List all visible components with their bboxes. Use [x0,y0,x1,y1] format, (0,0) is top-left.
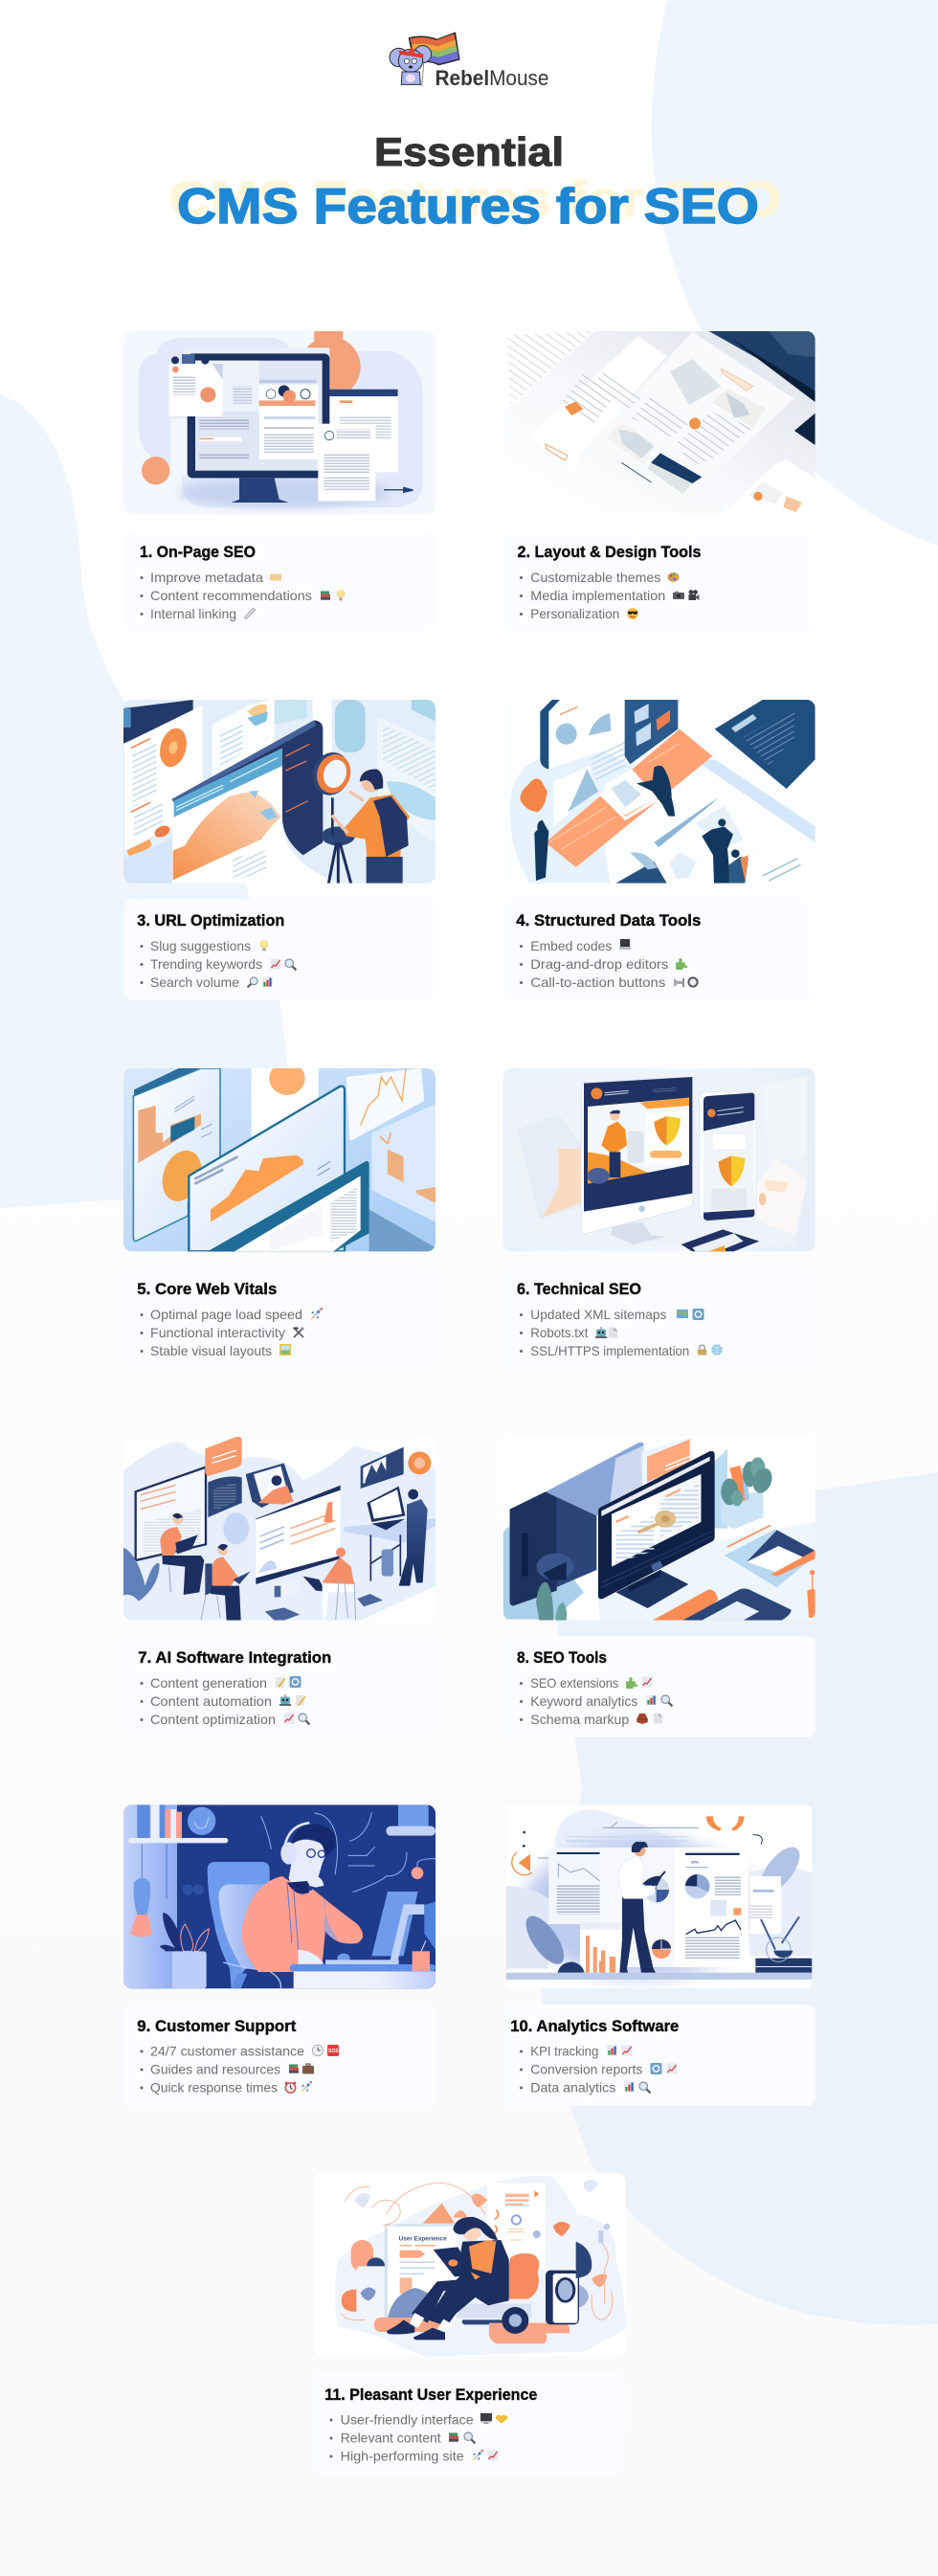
heading: 9. Customer Support [137,2017,297,2035]
illustration: desktop and tablet with shields [503,1068,815,1251]
heading: 4. Structured Data Tools [516,911,701,930]
list item: Functional interactivity: Functional interactivity [150,1325,285,1340]
illustration: isometric layout pages [503,331,815,514]
icon: mouse mascot [390,46,432,86]
illustration: man reviewing analytics [506,1804,812,1988]
heading: 3. URL Optimization [137,911,284,930]
list item: Slug suggestions: Slug suggestions [150,938,251,953]
list item: SSL/HTTPS implementation: SSL/HTTPS implementation [530,1343,689,1358]
title line 1: Essential [374,129,564,174]
heading: 5. Core Web Vitals [137,1280,277,1298]
list item: Content generation: Content generation [150,1675,267,1691]
list item: Content optimization: Content optimization [150,1712,276,1727]
list item: SEO extensions: SEO extensions [530,1675,618,1691]
text card [123,1636,436,1737]
panel: 11. Pleasant User Experience [313,2173,625,2475]
list item: Robots.txt [520,1325,617,1340]
list item: Data analytics: Data analytics [530,2079,615,2094]
heading: 2. Layout & Design Tools [517,543,701,561]
list item: Optimal page load speed: Optimal page load speed [150,1307,302,1322]
text card [313,2373,625,2475]
illustration: isometric monitor with key [503,1437,815,1621]
text card [503,2005,815,2106]
wordmark: RebelMouse [435,66,549,90]
panel: 2. Layout & Design Tools [503,331,815,632]
illustration: woman with tablet and UX page: User Experience [399,2236,447,2242]
text card [503,1267,815,1369]
list item: Robots.txt: Robots.txt [530,1325,588,1340]
list item: 24/7 customer assistance: 24/7 customer assistance [150,2043,304,2058]
icon: rainbow flag [409,32,460,65]
list item: Personalization: Personalization [530,606,619,621]
title [168,129,781,235]
panel: 1. On-Page SEO [123,331,436,632]
text card [123,530,436,632]
panel: 3. URL Optimization [123,700,436,1000]
list item: Customizable themes: Customizable themes [530,570,660,585]
illustration: support agent with headset [123,1804,436,1988]
list item: Content recommendations: Content recommendations [150,588,312,603]
list item: Stable visual layouts: Stable visual layouts [150,1343,272,1358]
heading: 6. Technical SEO [517,1280,641,1298]
list item: Quick response times: Quick response times [150,2079,278,2094]
panel: 10. Analytics Software [503,1804,815,2106]
panel: 5. Core Web Vitals [123,1062,436,1369]
list item: Improve metadata: Improve metadata [150,570,263,585]
list item: Drag-and-drop editors: Drag-and-drop editors [530,956,668,972]
list item: User-friendly interface: User-friendly interface [341,2412,474,2428]
list item: Internal linking: Internal linking [150,606,236,621]
list item: Keyword analytics: Keyword analytics [530,1693,637,1709]
illustration: man with magnifier [123,700,436,884]
list item: Schema markup [520,1712,662,1727]
title line 2: CMS Features for SEO [177,179,759,235]
list item: Relevant content: Relevant content [341,2430,441,2445]
illustration: team working at screens [123,1437,436,1621]
heading: 7. AI Software Integration [138,1648,331,1667]
icon: SOS [327,2045,339,2056]
list item: Embed codes: Embed codes [530,938,612,953]
list item: Search volume: Search volume [150,974,239,990]
title shadow text: CMS Features for SEO [168,171,781,228]
list item: Updated XML sitemaps: Updated XML sitemaps [530,1307,666,1322]
panel: 4. Structured Data Tools [503,700,815,1000]
logo: RebelMouse [390,32,549,90]
background blob: lower right [542,1472,938,2325]
list item: Conversion reports: Conversion reports [530,2062,642,2077]
icon: SOS: SOS [328,2049,339,2054]
list item: Call-to-action buttons: Call-to-action buttons [530,974,665,990]
heading: 10. Analytics Software [510,2017,679,2035]
list item: Schema markup: Schema markup [530,1712,630,1727]
list item: KPI tracking: KPI tracking [530,2043,598,2058]
heading: 1. On-Page SEO [140,543,256,561]
list item: Trending keywords: Trending keywords [150,956,262,972]
illustration: monitor with documents [123,331,436,514]
background blob: left [0,394,289,1208]
text card [503,1636,815,1737]
list item: Relevant content [329,2430,475,2445]
illustration: woman with tablet and UX page [313,2173,625,2357]
text card [503,899,815,1000]
list item: Media implementation: Media implementation [530,588,665,603]
heading: 11. Pleasant User Experience [324,2386,537,2404]
text card [123,899,436,1000]
list item: Data analytics [520,2079,650,2094]
text card [123,2005,436,2106]
illustration: isometric team with data blocks [503,700,815,884]
list item: KPI tracking [520,2043,632,2058]
list item: High-performing site: High-performing site [341,2449,464,2464]
panel: 8. SEO Tools [503,1437,815,1737]
heading: 8. SEO Tools [517,1648,607,1667]
text card [123,1267,436,1369]
panel: 6. Technical SEO [503,1068,815,1369]
list item: Content automation: Content automation [150,1693,272,1709]
text card [503,530,815,632]
background blob: top right [652,0,938,546]
panel: 7. AI Software Integration [123,1437,436,1737]
illustration: man reviewing analytics: 20% [691,1860,699,1865]
illustration: performance dashboards [123,1062,436,1251]
panel: 9. Customer Support [123,1804,436,2106]
list item: Guides and resources: Guides and resources [150,2062,280,2077]
list item: Search volume [140,974,273,990]
